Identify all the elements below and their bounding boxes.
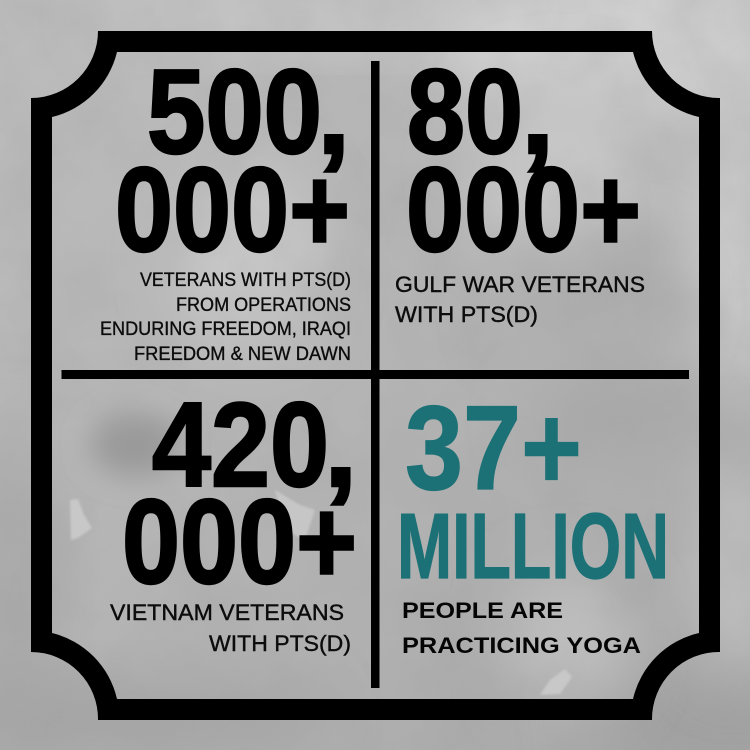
description: operations veterans: FROM OPERATIONS: [176, 295, 351, 316]
description: operations veterans: ENDURING FREEDOM, IRAQI: [100, 319, 351, 340]
stat: 420,000+: [122, 378, 357, 609]
stat: 37+: 37+: [405, 381, 582, 515]
vertical divider: [371, 61, 380, 688]
stat: 420,000+: 000+: [122, 475, 357, 609]
stat: 420,000+: 420: [152, 378, 329, 512]
stat: 80,000+: 80: [407, 45, 523, 179]
stat: 500,000+: 500: [147, 45, 322, 179]
description: operations veterans: [100, 270, 351, 365]
stat: 500,000+: ,: [317, 45, 350, 179]
description: operations veterans: FREEDOM & NEW DAWN: [134, 344, 351, 365]
description: Gulf War veterans: WITH PTS(D): [395, 302, 538, 327]
stat: 500,000+: 000+: [115, 143, 350, 277]
horizontal divider: [62, 370, 689, 379]
stat: 80,000+: [406, 45, 641, 277]
description: Vietnam veterans: [110, 600, 351, 656]
panel: recent operations veterans: [100, 45, 351, 365]
stat: 80,000+: 000+: [406, 143, 641, 277]
description: Gulf War veterans: [395, 272, 645, 327]
description: Vietnam veterans: WITH PTS(D): [209, 631, 351, 656]
panel: people practicing yoga: [397, 381, 669, 658]
description: Vietnam veterans: VIETNAM VETERANS: [110, 600, 344, 625]
panel: Vietnam veterans: [110, 378, 357, 656]
stat: 500,000+: [115, 45, 350, 277]
description: operations veterans: VETERANS WITH PTS(D): [140, 270, 351, 291]
description: people practicing yoga: PRACTICING YOGA: [402, 633, 641, 658]
stat: 420,000+: ,: [324, 378, 357, 512]
description: Gulf War veterans: GULF WAR VETERANS: [395, 272, 645, 297]
description: people practicing yoga: [402, 598, 641, 658]
panel: Gulf War veterans: [395, 45, 645, 327]
stat: 80,000+: ,: [521, 45, 554, 179]
description: people practicing yoga: PEOPLE ARE: [402, 598, 563, 623]
